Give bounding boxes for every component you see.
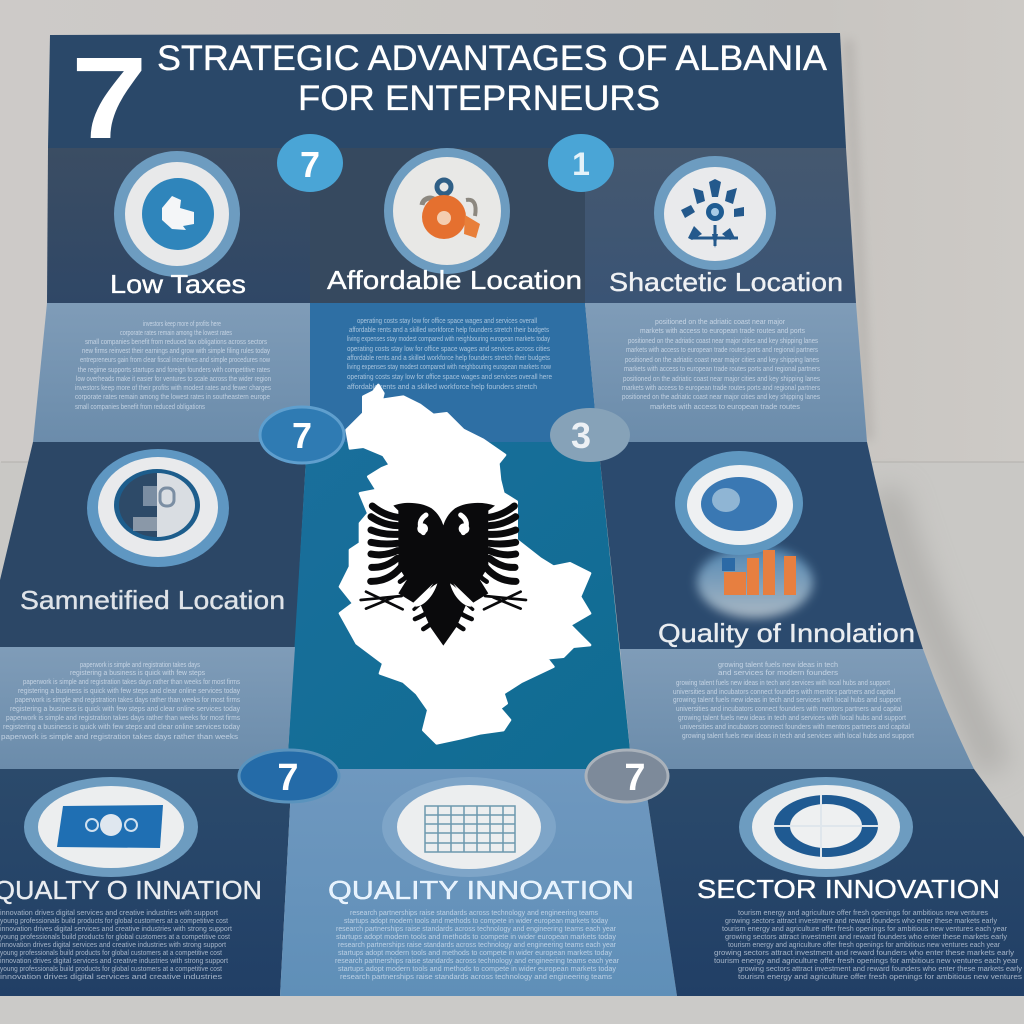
text block: strategic location: positioned on the adriatic coast near major cities and key shipping lanes <box>628 336 818 345</box>
text block: sector innovation: tourism energy and agriculture offer fresh openings for ambitious new ventures <box>738 972 1022 981</box>
text block: quality of innovation: universities and incubators connect founders with mentors partners and capital <box>676 704 902 713</box>
text block: quality of innovation: growing talent fuels new ideas in tech <box>718 660 838 669</box>
text block: quality innovation left: young professionals build products for global customers at a competitive cost <box>0 948 223 957</box>
panel: quality innovation middle <box>280 769 677 996</box>
panel: quality innovation left <box>0 769 292 996</box>
text block: strategic location: positioned on the adriatic coast near major cities and key shipping lanes <box>625 355 819 364</box>
panel: simplified text <box>0 647 295 769</box>
text block: sector innovation <box>714 908 1022 981</box>
text block: low taxes <box>75 319 271 411</box>
text block: strategic location: positioned on the adriatic coast near major cities and key shipping lanes <box>623 374 820 383</box>
text block: low taxes: the regime supports startups and foreign founders with competitive rates <box>78 365 270 374</box>
text block: affordable location: affordable rents and a skilled workforce help founders stretch their budgets <box>349 325 549 334</box>
label: low taxes: Low Taxes <box>110 269 246 299</box>
text block: low taxes: corporate rates remain among the lowest rates in southeastern europe <box>75 392 270 401</box>
panel: low taxes text <box>33 303 310 442</box>
text block: affordable location <box>347 316 552 391</box>
text block: quality of innovation: growing talent fuels new ideas in tech and services with local hubs and support <box>682 731 915 740</box>
panel: centre map background <box>287 442 632 769</box>
text block: quality innovation left: young professionals build products for global customers at a competitive cost <box>0 932 231 941</box>
label: quality innovation middle: QUALITY INNOATION <box>328 875 634 905</box>
badge: 7 bottom left: 7 <box>277 757 299 799</box>
badge: 3 middle right <box>550 408 630 462</box>
panel: sector innovation <box>643 769 1024 996</box>
panel: simplified location <box>0 442 307 647</box>
text block: quality innovation middle: research partnerships raise standards across technology and engineering teams each year <box>336 924 616 933</box>
text block: quality innovation left: innovation drives digital services and creative industries <box>0 972 222 981</box>
panel: low taxes <box>47 148 310 303</box>
text block: quality innovation middle: startups adopt modern tools and methods to compete in wider european markets today <box>338 964 616 973</box>
panel: quality of innovation <box>598 442 923 649</box>
badge: 1 top right <box>548 134 614 192</box>
text block: strategic location: markets with access to european trade routes ports and regional partners <box>622 383 820 392</box>
label: affordable location: Affordable Location <box>327 265 582 295</box>
icon: simplified location <box>87 449 229 567</box>
text block: strategic location: positioned on the adriatic coast near major cities and key shipping lanes <box>622 392 820 401</box>
text block: quality innovation middle: startups adopt modern tools and methods to compete in wider european markets today <box>338 948 612 957</box>
icon: quality of innovation <box>675 451 813 618</box>
text block: strategic location: markets with access to european trade routes <box>650 402 800 411</box>
label: quality innovation left: QUALTY O INNATION <box>0 875 262 905</box>
title <box>157 39 828 118</box>
text block: quality innovation left: innovation drives digital services and creative industries with support <box>0 908 219 917</box>
text block: simplified location: registering a business is quick with few steps <box>70 668 205 677</box>
text block: sector innovation: tourism energy and agriculture offer fresh openings for ambitious new ventures each year <box>722 924 1007 933</box>
text block: simplified location: paperwork is simple and registration takes days rather than weeks for most firms <box>6 713 240 722</box>
map silhouette <box>340 385 590 743</box>
icon: target dial <box>739 777 913 877</box>
text block: affordable location: operating costs stay low for office space wages and services overall here <box>347 372 552 381</box>
text block: quality innovation left: innovation drives digital services and creative industries with strong support <box>0 956 229 965</box>
panel: strategic location <box>585 148 856 303</box>
text block: low taxes: low overheads make it easier for ventures to scale across the wider region <box>76 374 271 383</box>
text block: quality innovation left: innovation drives digital services and creative industries with strong support <box>0 940 227 949</box>
text block: sector innovation: growing sectors attract investment and reward founders who enter these markets early <box>714 948 1014 957</box>
text block: quality innovation left <box>0 908 233 981</box>
text block: quality of innovation: growing talent fuels new ideas in tech and services with local hubs and support <box>676 678 891 687</box>
text block: simplified location <box>1 660 240 741</box>
text block: quality innovation middle: research partnerships raise standards across technology and engineering teams <box>350 908 598 917</box>
text block: affordable location: affordable rents and a skilled workforce help founders stretch their budgets <box>347 353 550 362</box>
text block: quality of innovation: and services for modern founders <box>718 668 838 677</box>
text block: sector innovation: tourism energy and agriculture offer fresh openings for ambitious new ventures each year <box>714 956 1018 965</box>
text block: strategic location <box>622 317 820 411</box>
icon: grid calendar <box>382 777 556 877</box>
icon: quality innovation left <box>24 777 198 877</box>
text block: quality innovation middle: startups adopt modern tools and methods to compete in wider european markets today <box>336 932 616 941</box>
text block: low taxes: small companies benefit from reduced tax obligations across sectors <box>85 337 267 346</box>
text block: affordable location: living expenses stay modest compared with neighbouring european markets now <box>347 362 551 371</box>
text block: simplified location: paperwork is simple and registration takes days rather than weeks for most firms <box>15 695 240 704</box>
panel: quality text <box>620 649 974 769</box>
text block: quality innovation left: innovation drives digital services and creative industries with strong support <box>0 924 233 933</box>
text block: sector innovation: tourism energy and agriculture offer fresh openings for ambitious new ventures each year <box>728 940 1000 949</box>
label: quality of innovation: Quality of Innolation <box>658 618 915 648</box>
text block: quality of innovation: growing talent fuels new ideas in tech and services with local hubs and support <box>673 695 902 704</box>
text block: simplified location: paperwork is simple and registration takes days <box>80 660 200 669</box>
map of Albania with eagle <box>340 385 590 743</box>
badge: 7 top left: 7 <box>300 144 320 185</box>
text block: affordable location: operating costs stay low for office space wages and services overall <box>357 316 537 325</box>
text block: affordable location: operating costs stay low for office space wages and services across cities <box>347 344 550 353</box>
panel: affordable location <box>310 148 585 303</box>
badge: 7 middle left: 7 <box>292 415 312 456</box>
title: STRATEGIC ADVANTAGES OF ALBANIA <box>157 39 828 78</box>
text block: low taxes: investors keep more of profits here <box>143 319 221 328</box>
text block: simplified location: registering a business is quick with few steps and clear online services today <box>18 686 240 695</box>
text block: sector innovation: tourism energy and agriculture offer fresh openings for ambitious new ventures <box>738 908 988 917</box>
label: strategic location: Shactetic Location <box>609 267 843 297</box>
text block: quality innovation middle: startups adopt modern tools and methods to compete in wider european markets today <box>344 916 608 925</box>
eagle emblem <box>361 503 526 646</box>
badge: 1 top right: 1 <box>572 146 590 182</box>
text block: simplified location: paperwork is simple and registration takes days rather than weeks for most firms <box>23 677 240 686</box>
text block: sector innovation: growing sectors attract investment and reward founders who enter these markets early <box>725 932 1007 941</box>
text block: sector innovation: growing sectors attract investment and reward founders who enter these markets early <box>738 964 1022 973</box>
text block: sector innovation: growing sectors attract investment and reward founders who enter these markets early <box>725 916 997 925</box>
text block: low taxes: investors keep more of their profits with modest rates and fewer charges <box>75 383 271 392</box>
panel: affordable text <box>310 303 598 442</box>
text block: strategic location: markets with access to european trade routes and ports <box>640 326 805 335</box>
text block: quality of innovation: universities and incubators connect founders with mentors partners and capital <box>673 687 895 696</box>
badge: 7 bottom right: 7 <box>624 757 646 799</box>
text block: quality of innovation: growing talent fuels new ideas in tech and services with local hubs and support <box>678 713 907 722</box>
text block: strategic location: positioned on the adriatic coast near major <box>655 317 785 326</box>
text block: simplified location: registering a business is quick with few steps and clear online services today <box>10 704 240 713</box>
badge: 3 middle right: 3 <box>571 415 591 456</box>
text block: affordable location: living expenses stay modest compared with neighbouring european markets today <box>347 334 550 343</box>
text block: quality of innovation <box>673 660 915 740</box>
title numeral: 7 <box>71 33 147 163</box>
badge: 7 middle left <box>260 407 344 463</box>
text block: quality innovation middle <box>335 908 619 981</box>
text block: quality of innovation: universities and incubators connect founders with mentors partners and capital <box>680 722 910 731</box>
panel: header <box>48 33 846 148</box>
text block: quality innovation middle: research partnerships raise standards across technology and engineering teams each year <box>335 956 619 965</box>
text block: simplified location: registering a business is quick with few steps and clear online services today <box>3 722 240 731</box>
text block: simplified location: paperwork is simple and registration takes days rather than weeks <box>1 732 238 741</box>
text block: low taxes: new firms reinvest their earnings and grow with simple filing rules today <box>82 346 270 355</box>
text block: quality innovation middle: research partnerships raise standards across technology and engineering teams each year <box>338 940 616 949</box>
text block: strategic location: markets with access to european trade routes ports and regional partners <box>624 364 820 373</box>
text block: low taxes: corporate rates remain among the lowest rates <box>120 328 232 337</box>
title: FOR ENTEPRNEURS <box>298 79 660 118</box>
panel: strategic text <box>585 303 867 442</box>
text block: affordable location: affordable rents and a skilled workforce help founders stretch <box>347 382 537 391</box>
text block: quality innovation left: young professionals build products for global customers at a competitive cost <box>0 916 229 925</box>
badge: 7 bottom left <box>239 750 339 802</box>
label: simplified location: Samnetified Location <box>20 585 285 615</box>
text block: low taxes: entrepreneurs gain from clear fiscal incentives and simple procedures now <box>80 355 270 364</box>
badge: 7 top left <box>277 134 343 192</box>
text block: quality innovation middle: research partnerships raise standards across technology and engineering teams <box>340 972 612 981</box>
icon: affordable location <box>384 148 510 274</box>
label: sector innovation: SECTOR INNOVATION <box>697 874 1000 904</box>
icon: strategic location <box>654 156 776 270</box>
text block: quality innovation left: young professionals build products for global customers at a competitive cost <box>0 964 223 973</box>
icon: low taxes <box>114 151 240 277</box>
text block: low taxes: small companies benefit from reduced obligations <box>75 402 205 411</box>
text block: strategic location: markets with access to european trade routes ports and regional partners <box>626 345 818 354</box>
badge: 7 bottom right <box>586 750 668 802</box>
